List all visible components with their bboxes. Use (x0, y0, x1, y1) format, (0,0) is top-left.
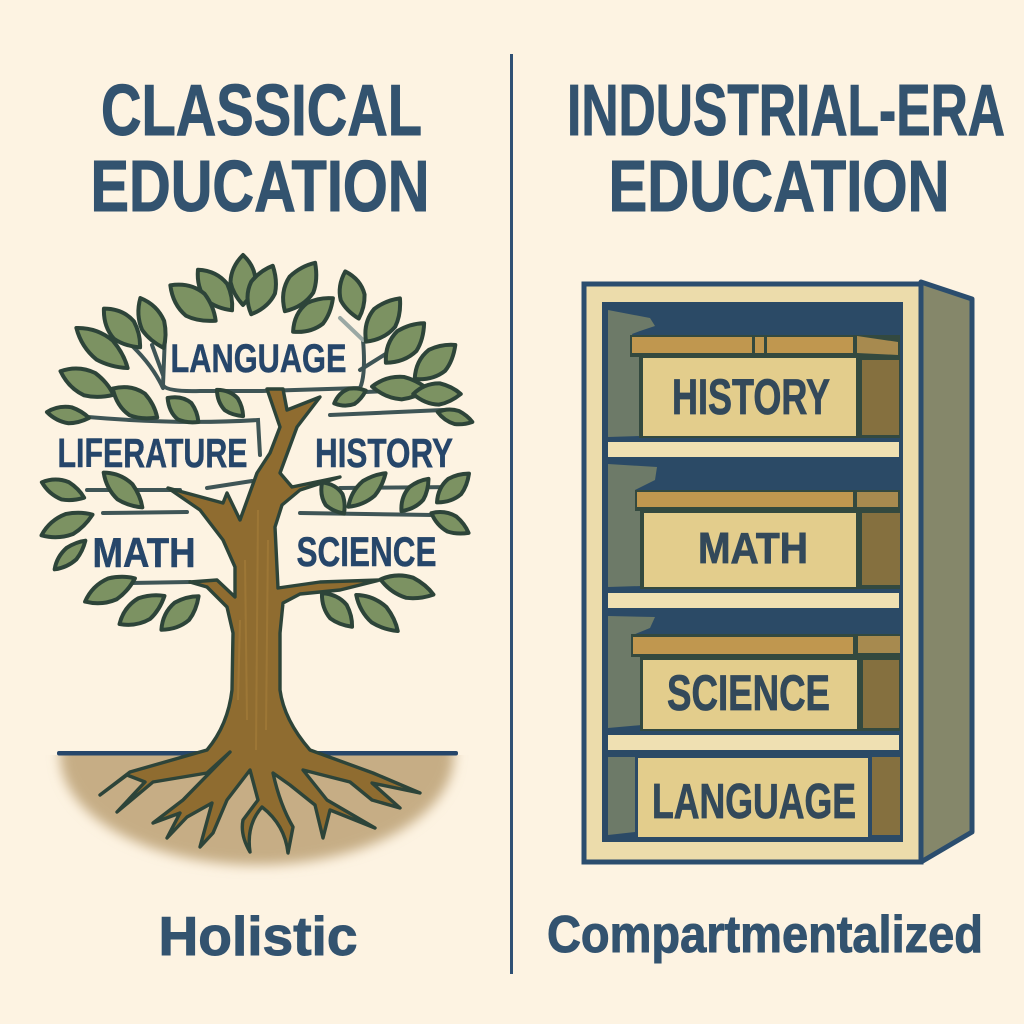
label: history: HISTORY (315, 430, 453, 476)
ground line (57, 751, 458, 756)
box: history: HISTORY (672, 369, 830, 425)
shelf boards (608, 442, 899, 750)
shelf frame (584, 284, 921, 862)
soil mound (52, 755, 462, 873)
box: language (638, 757, 900, 837)
box: history (630, 335, 900, 438)
caption: holistic: Holistic (158, 905, 358, 967)
label: science: SCIENCE (296, 528, 436, 575)
shelf side panel (921, 282, 972, 862)
box: math: MATH (698, 524, 808, 573)
caption: compartmentalized: Compartmentalized (547, 906, 983, 964)
title: industrial-era education (567, 71, 1005, 227)
twigs and language box (87, 318, 463, 583)
tree illustration (38, 255, 476, 865)
label: language: LANGUAGE (170, 337, 346, 381)
leaves (38, 255, 476, 639)
title: classical education: CLASSICAL (101, 71, 422, 151)
box: science (631, 634, 900, 731)
title: classical education (90, 71, 430, 227)
bookshelf (584, 282, 972, 862)
box: math (635, 490, 900, 589)
label: math: MATH (92, 529, 196, 576)
interior left walls (608, 310, 657, 835)
tree trunk, branches and roots (100, 389, 420, 853)
box: science: SCIENCE (667, 665, 830, 721)
shelf interior (602, 302, 903, 842)
label: literature: LIFERATURE (58, 430, 248, 476)
title: classical education: EDUCATION (90, 147, 430, 227)
box: language: LANGUAGE (652, 775, 856, 829)
title: industrial-era education: EDUCATION (608, 147, 950, 227)
trunk texture (238, 510, 268, 750)
center divider (510, 54, 513, 974)
